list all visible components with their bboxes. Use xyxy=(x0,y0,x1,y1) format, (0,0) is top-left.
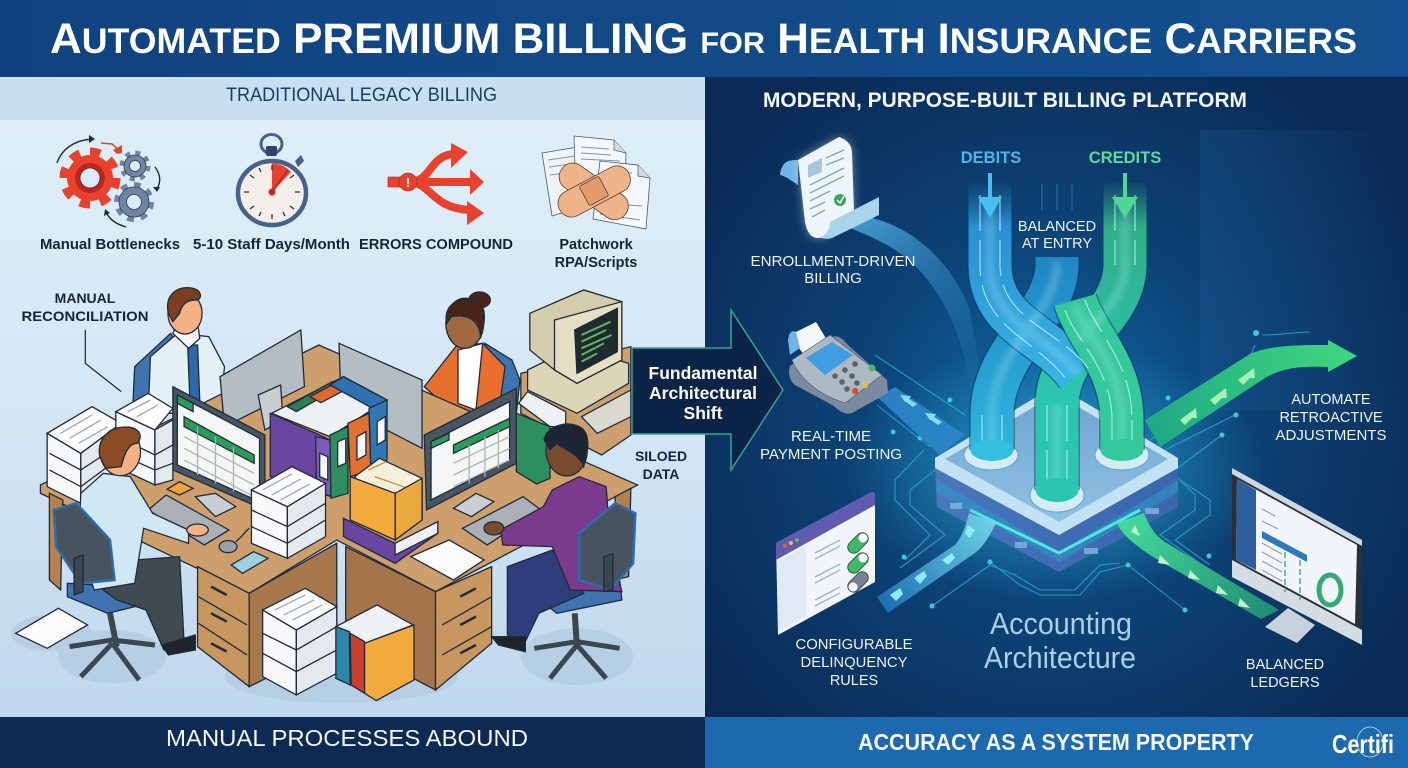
label: real-time payment posting: REAL-TIME xyxy=(791,428,871,445)
label: real-time payment posting xyxy=(760,428,902,463)
binders on floor xyxy=(336,605,414,701)
circuit traces xyxy=(875,332,1310,610)
subheading band: traditional legacy billing: TRADITIONAL LEGACY BILLING xyxy=(226,85,497,106)
arrow: fundamental architectural shift: Architectural xyxy=(649,383,757,403)
label: configurable delinquency rules xyxy=(796,637,913,689)
icon: payment terminal xyxy=(788,322,888,414)
platform base xyxy=(935,385,1178,572)
label: configurable delinquency rules: RULES xyxy=(830,673,878,689)
computer desk xyxy=(521,347,631,455)
pipe ends xyxy=(970,439,1144,502)
label: balanced at entry: BALANCED xyxy=(1018,219,1096,235)
heading: modern platform: MODERN, PURPOSE-BUILT BILLING PLATFORM xyxy=(763,89,1247,112)
icon: delinquency rules window xyxy=(776,492,875,635)
right drawer pedestal xyxy=(346,488,631,690)
label: configurable delinquency rules: DELINQUENCY xyxy=(800,655,908,671)
arrow: fundamental architectural shift: Shift xyxy=(684,403,723,423)
label: automate retroactive adjustments: RETROACTIVE xyxy=(1279,410,1383,426)
label: manual reconciliation: RECONCILIATION xyxy=(22,308,148,324)
icon: balanced ledgers monitor xyxy=(1232,468,1362,645)
flow ribbon: automate retroactive adjustments arrow xyxy=(1145,340,1357,447)
label: accounting architecture: Architecture xyxy=(984,640,1136,675)
label: accounting architecture: Accounting xyxy=(990,606,1132,641)
label: accounting architecture xyxy=(984,606,1136,675)
icon: debits arrow xyxy=(978,173,1002,218)
subheading band: traditional legacy billing xyxy=(0,77,705,120)
loose paper xyxy=(16,608,88,648)
icon: patched documents xyxy=(542,136,650,229)
label: balanced ledgers: LEDGERS xyxy=(1250,675,1320,691)
callout line: manual reconciliation xyxy=(85,330,121,392)
label: configurable delinquency rules: CONFIGURABLE xyxy=(796,637,913,653)
flow ribbon: delinquency rules xyxy=(877,513,996,613)
footer left: manual processes abound xyxy=(0,717,705,768)
footer right: accuracy as a system property: ACCURACY AS A SYSTEM PROPERTY xyxy=(858,729,1254,755)
logo: certifi: Certifi xyxy=(1332,729,1394,759)
yellow folder on purple binder xyxy=(343,458,438,563)
flow ribbon: enrollment to pipes xyxy=(850,216,985,400)
icon labels: ERRORS COMPOUND xyxy=(359,237,513,253)
label: credits: CREDITS xyxy=(1089,149,1161,167)
label: balanced ledgers: BALANCED xyxy=(1246,657,1324,673)
icon: enrollment billing scroll xyxy=(780,137,879,239)
standing man xyxy=(132,288,224,413)
label: balanced at entry xyxy=(1018,219,1096,252)
right monitor xyxy=(424,388,516,517)
label: automate retroactive adjustments: AUTOMATE xyxy=(1291,392,1371,408)
label: siloed data xyxy=(635,448,687,482)
label: siloed data: SILOED xyxy=(635,448,687,464)
keyboards and desk items xyxy=(148,482,541,580)
label: balanced ledgers xyxy=(1246,657,1324,691)
central glow xyxy=(846,340,1266,600)
icon labels: Patchwork xyxy=(559,237,634,253)
label: enrollment-driven billing: BILLING xyxy=(804,270,862,287)
paper stacks xyxy=(47,393,337,695)
panel: modern purpose-built billing platform xyxy=(705,77,1408,717)
upright binders xyxy=(270,377,387,498)
icon: stopwatch xyxy=(238,134,306,225)
braided pipes: debits, credits, balanced xyxy=(980,183,1135,490)
footer left: manual processes abound: MANUAL PROCESSES ABOUND xyxy=(166,725,528,751)
label: automate retroactive adjustments: ADJUSTMENTS xyxy=(1276,428,1386,444)
seated man left xyxy=(54,427,208,680)
desk top xyxy=(40,345,638,593)
label: automate retroactive adjustments xyxy=(1276,392,1386,444)
illustration: cluttered office desks xyxy=(11,288,638,703)
label: enrollment-driven billing: ENROLLMENT-DRIVEN xyxy=(750,253,916,270)
desk partitions xyxy=(220,330,422,448)
floor shadows xyxy=(11,615,633,703)
icon labels: RPA/Scripts xyxy=(555,255,637,271)
footer right: accuracy as a system property xyxy=(705,717,1408,768)
flow ribbon: balanced ledgers xyxy=(1117,513,1279,619)
arrow: fundamental architectural shift xyxy=(632,310,783,470)
label: manual reconciliation: MANUAL xyxy=(55,290,116,306)
panel: traditional legacy billing xyxy=(0,77,705,717)
icon labels xyxy=(40,237,637,271)
rear green binder xyxy=(516,392,566,484)
icon: errors compound arrows: ! xyxy=(406,175,410,190)
label: real-time payment posting: PAYMENT POSTING xyxy=(760,446,902,463)
label: balanced at entry: AT ENTRY xyxy=(1022,236,1092,252)
arrow: fundamental architectural shift: Fundamental xyxy=(649,363,757,383)
title: AUTOMATED PREMIUM BILLING FOR HEALTH INSURANCE CARRIERS xyxy=(50,15,1357,63)
legacy computer xyxy=(528,290,631,433)
icon: credits arrow xyxy=(1112,173,1138,218)
icon labels: 5-10 Staff Days/Month xyxy=(193,237,350,253)
circuit nodes xyxy=(890,330,1259,612)
label: enrollment-driven billing xyxy=(750,253,916,287)
icon: manual bottleneck gears xyxy=(57,135,160,227)
left drawer pedestal xyxy=(49,493,337,687)
left monitor xyxy=(173,387,265,517)
seated man right xyxy=(484,424,635,678)
flow ribbon: payment posting xyxy=(877,387,965,455)
icon: errors compound arrows xyxy=(388,143,484,225)
seated woman xyxy=(424,292,520,413)
icon labels: Manual Bottlenecks xyxy=(40,237,180,253)
pipe collars xyxy=(964,440,1149,512)
label: siloed data: DATA xyxy=(643,466,679,482)
header bar xyxy=(0,0,1408,77)
label: debits: DEBITS xyxy=(961,149,1021,167)
label: manual reconciliation xyxy=(22,290,148,324)
